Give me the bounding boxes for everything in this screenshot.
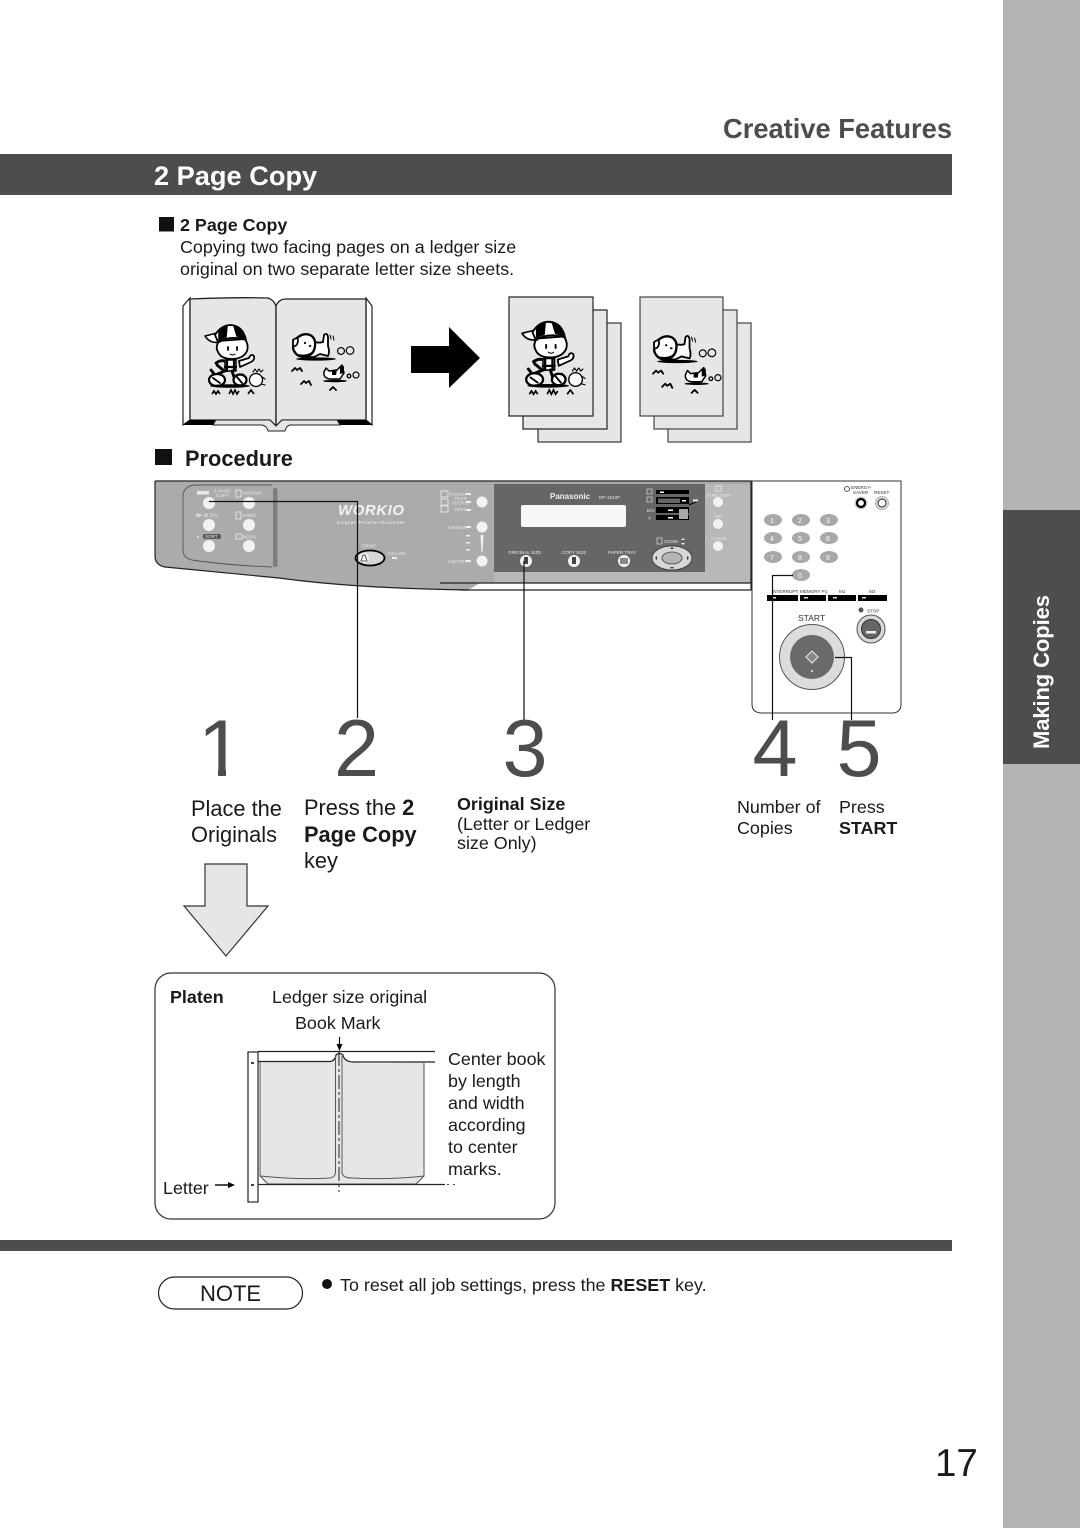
description block: Copying two facing pages on a ledger size bbox=[180, 237, 516, 257]
numeric keypad: 8 bbox=[798, 555, 802, 562]
arrow: down to platen bbox=[184, 864, 268, 956]
print button: PRINT bbox=[362, 544, 376, 548]
step 1: Originals bbox=[191, 822, 277, 847]
display section: Y bbox=[648, 516, 651, 521]
platen diagram bbox=[248, 1037, 456, 1202]
step 1: Place the bbox=[191, 796, 282, 821]
memory key strip: M2 bbox=[869, 589, 876, 594]
footer rule bbox=[0, 1240, 952, 1251]
display section: DP-1810P bbox=[599, 495, 620, 500]
step 4: 4 bbox=[752, 704, 798, 794]
step 4: Copies bbox=[737, 818, 793, 838]
display section bbox=[494, 484, 705, 572]
logo: Workio: Copier/Printer/Scanner bbox=[337, 520, 405, 525]
sidebar: grey side tab bbox=[1003, 0, 1080, 1528]
numeric keypad: 1 bbox=[770, 518, 774, 525]
panel group: copy features: EDGE bbox=[243, 513, 256, 518]
sidebar label: Making Copies: Making Copies bbox=[1029, 595, 1054, 749]
instruction text: to center bbox=[448, 1137, 518, 1157]
numeric keypad: 4 bbox=[770, 536, 774, 543]
function keys bbox=[707, 486, 731, 551]
memory key strip: INTERRUPT bbox=[772, 589, 798, 594]
image mode and density controls: TEXT/ bbox=[454, 496, 468, 501]
print button bbox=[356, 544, 406, 566]
arrow: to copies bbox=[411, 327, 480, 388]
step 3: size Only) bbox=[457, 833, 537, 853]
logo: Workio: WORKIO bbox=[338, 502, 404, 519]
note text: To reset all job settings, press the RESET key. bbox=[340, 1275, 707, 1295]
image mode and density controls bbox=[441, 491, 488, 566]
stop button: STOP bbox=[867, 608, 879, 614]
illustration: second copy stack bbox=[640, 297, 751, 442]
energy saver and reset: SAVER bbox=[853, 490, 869, 495]
description block: 2 Page Copy bbox=[180, 215, 287, 235]
print button: ON LINE bbox=[388, 551, 406, 556]
step 1: 1 bbox=[198, 704, 243, 794]
panel group: copy features bbox=[183, 485, 278, 567]
numeric keypad: 2 bbox=[798, 518, 802, 525]
function keys: CLEAR bbox=[711, 536, 727, 541]
image mode and density controls: TEXT bbox=[454, 507, 466, 512]
zoom control: ZOOM bbox=[664, 539, 678, 544]
dog picture bbox=[292, 334, 359, 390]
numeric keypad: 6 bbox=[826, 536, 830, 543]
instruction text bbox=[448, 1049, 546, 1179]
panel group: copy features: ▦▸ ▥ 2in1 bbox=[196, 512, 219, 518]
image mode and density controls: PHOTO bbox=[452, 500, 469, 506]
leader line: step 4 bbox=[772, 576, 793, 720]
display section: Panasonic bbox=[550, 492, 591, 501]
memory key strip: M1 bbox=[839, 589, 846, 594]
step 2: Page Copy bbox=[304, 822, 417, 847]
panel group: copy features: COPY bbox=[216, 493, 229, 498]
function keys: SET bbox=[714, 514, 723, 519]
dog picture copy bbox=[653, 336, 721, 393]
image mode and density controls: PHOTO bbox=[450, 492, 467, 497]
step 4 bbox=[737, 704, 821, 838]
function keys: FUNCTION bbox=[707, 493, 731, 498]
boy picture copy bbox=[522, 322, 585, 394]
image mode and density controls: LIGHTER bbox=[448, 559, 469, 564]
memory key strip: MEMORY P1 bbox=[800, 589, 828, 594]
leader line: step 2 bbox=[209, 502, 358, 718]
step 5: 5 bbox=[836, 704, 882, 794]
panel group: copy features: SORT bbox=[205, 534, 218, 539]
description block: original on two separate letter size sheets. bbox=[180, 259, 514, 279]
boy picture bbox=[205, 325, 265, 394]
instruction text: according bbox=[448, 1115, 526, 1135]
description block bbox=[159, 215, 516, 279]
panel group: copy features: MARGIN bbox=[243, 490, 261, 496]
image mode and density controls: DARKER bbox=[448, 525, 468, 530]
step 3: Original Size bbox=[457, 794, 565, 814]
step 3: (Letter or Ledger bbox=[457, 814, 590, 834]
display section: ORIGINAL SIZE bbox=[508, 550, 541, 555]
header band: 2 Page Copy bbox=[0, 154, 952, 195]
leader line: step 5 bbox=[835, 658, 852, 720]
display section: COPY SIZE bbox=[562, 550, 586, 555]
start button: START bbox=[798, 613, 825, 623]
display section: PAPER TRAY bbox=[608, 550, 636, 555]
numeric keypad: 9 bbox=[826, 555, 830, 562]
step 1 bbox=[192, 720, 281, 846]
label: letter: Letter bbox=[163, 1178, 209, 1198]
control panel: keypad side bbox=[752, 481, 901, 713]
instruction text: and width bbox=[448, 1093, 525, 1113]
note badge: NOTE bbox=[200, 1281, 261, 1306]
step 2: 2 bbox=[334, 704, 379, 794]
panel group: copy features: 2 PAGE bbox=[214, 488, 230, 494]
numeric keypad: 0 bbox=[798, 573, 802, 580]
platen heading: Platen bbox=[170, 987, 224, 1007]
start button bbox=[780, 613, 844, 690]
step 3 bbox=[457, 704, 590, 853]
step 2: key bbox=[304, 848, 338, 873]
numeric keypad: 5 bbox=[798, 536, 802, 543]
energy saver and reset bbox=[844, 485, 890, 510]
panel group: copy features: ▸ bbox=[197, 534, 200, 539]
step 3: 3 bbox=[502, 704, 548, 794]
step 2 bbox=[304, 704, 417, 873]
header band: 2 Page Copy: 2 Page Copy bbox=[154, 160, 317, 191]
label: letter bbox=[163, 1178, 235, 1198]
note badge bbox=[158, 1277, 302, 1309]
step 5 bbox=[836, 704, 897, 838]
illustration: open book original bbox=[183, 298, 372, 431]
instruction text: marks. bbox=[448, 1159, 502, 1179]
step 2: Press the 2 bbox=[304, 795, 414, 820]
display section: B/V bbox=[647, 508, 655, 513]
numeric keypad: 3 bbox=[826, 518, 830, 525]
memory key strip bbox=[767, 589, 887, 601]
instruction text: Center book bbox=[448, 1049, 546, 1069]
zoom control bbox=[652, 538, 692, 570]
label: book mark: Book Mark bbox=[295, 1013, 381, 1033]
panel: platen bbox=[155, 973, 555, 1219]
step 4: Number of bbox=[737, 797, 821, 817]
instruction text: by length bbox=[448, 1071, 521, 1091]
step 5: Press bbox=[839, 797, 885, 817]
section title: Creative Features: Creative Features bbox=[723, 113, 952, 144]
leader line: step 3 bbox=[523, 561, 525, 720]
control panel: main bbox=[155, 481, 752, 590]
illustration: first copy stack bbox=[509, 297, 621, 442]
step 5: START bbox=[839, 818, 897, 838]
stop button bbox=[857, 608, 885, 643]
energy saver and reset: ENERGY- bbox=[851, 485, 872, 490]
numeric keypad: 7 bbox=[770, 555, 774, 562]
panel group: copy features: BOOK bbox=[243, 534, 257, 540]
heading: Procedure: Procedure bbox=[185, 446, 293, 471]
energy saver and reset: RESET bbox=[874, 490, 890, 495]
page number: 17 bbox=[935, 1442, 978, 1485]
numeric keypad bbox=[764, 514, 838, 581]
label: ledger size original: Ledger size original bbox=[272, 987, 427, 1007]
